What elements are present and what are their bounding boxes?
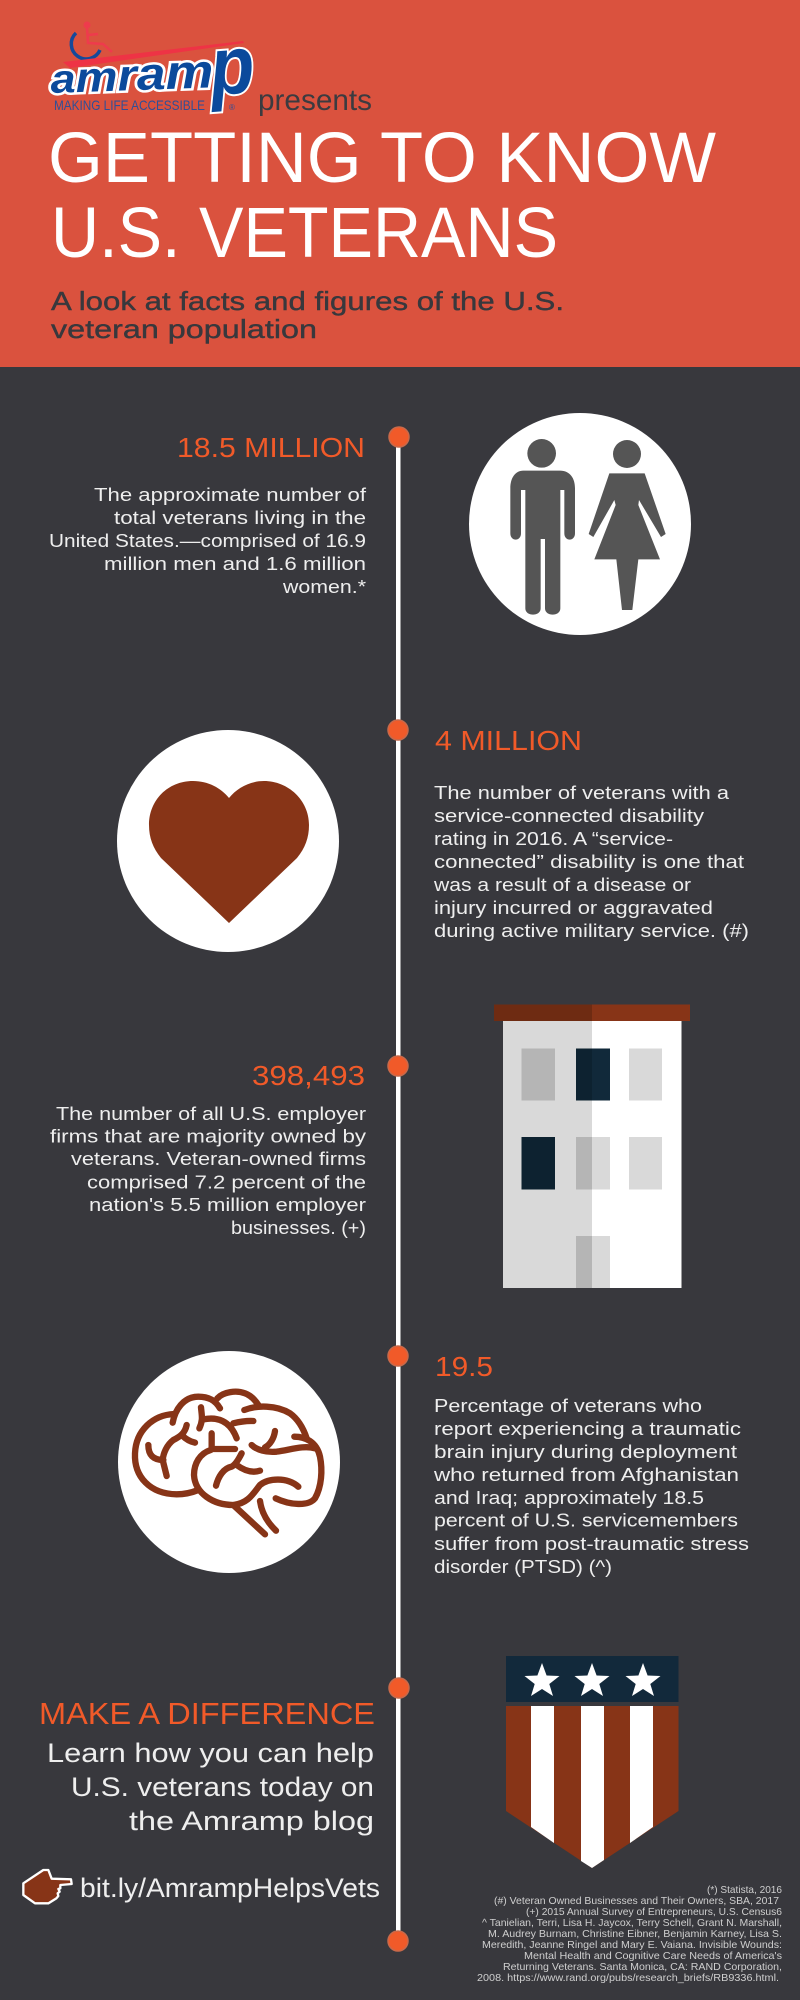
footnotes: Meredith, Jeanne Ringel and Mary E. Vaiana. Invisible Wounds: (482, 1939, 782, 1951)
text block: employer firms: comprised 7.2 percent of the (87, 1172, 366, 1192)
title (48, 119, 716, 273)
text block: call to action: U.S. veterans today on (71, 1772, 374, 1802)
text block: traumatic brain injury: suffer from post-traumatic stress (434, 1533, 749, 1554)
panel: 19.5 percent brain injury (118, 1351, 749, 1577)
icon: brain in circle (118, 1351, 340, 1573)
footnotes: 2008. https://www.rand.org/pubs/research_briefs/RB9336.html. (477, 1972, 779, 1984)
icon: heart in circle (117, 730, 339, 952)
text block: employer firms: firms that are majority owned by (50, 1126, 367, 1146)
text block: employer firms: nation's 5.5 million employer (89, 1194, 366, 1215)
icon: pointing hand (23, 1870, 72, 1903)
text block: total veterans: The approximate number of (94, 484, 367, 505)
text block: disability rating: The number of veterans with a (434, 782, 730, 803)
text block: employer firms: The number of all U.S. employer (56, 1103, 366, 1124)
title: U.S. VETERANS (51, 194, 558, 273)
footnotes: Mental Health and Cognitive Care Needs of America's (524, 1950, 782, 1962)
text block: traumatic brain injury: percent of U.S. servicemembers (434, 1510, 738, 1530)
text block: traumatic brain injury: brain injury during deployment (434, 1441, 737, 1462)
panel: make a difference (23, 1696, 380, 1903)
subtitle: veteran population (51, 314, 317, 344)
footnotes: ^ Tanielian, Terri, Lisa H. Jaycox, Terry Schell, Grant N. Marshall, (482, 1917, 782, 1929)
icon: building (494, 1004, 690, 1288)
footnotes: (#) Veteran Owned Businesses and Their Owners, SBA, 2017 (494, 1895, 779, 1907)
heading: 4 million: 4 MILLION (435, 725, 582, 756)
text block: employer firms (50, 1103, 367, 1238)
timeline (388, 427, 409, 1951)
icon: flag shield (506, 1656, 678, 1868)
text block: disability rating: was a result of a disease or (433, 874, 691, 895)
text block: employer firms: businesses. (+) (231, 1217, 366, 1238)
panel: header (0, 0, 800, 367)
footnotes: M. Audrey Burnam, Christine Eibner, Benjamin Karney, Lisa S. (488, 1928, 782, 1940)
logo: amramp: amram (50, 45, 214, 104)
heading: make a difference: MAKE A DIFFERENCE (39, 1696, 375, 1731)
text block: disability rating (433, 782, 749, 941)
logo: amramp: MAKING LIFE ACCESSIBLE (54, 97, 205, 113)
text block: traumatic brain injury: disorder (PTSD) (^) (434, 1556, 612, 1577)
footnotes: (*) Statista, 2016 (707, 1884, 782, 1896)
text block: traumatic brain injury: and Iraq; approximately 18.5 (434, 1487, 704, 1508)
text block: total veterans: United States.—comprised of 16.9 (49, 530, 366, 551)
text block: disability rating: connected” disability is one that (434, 851, 744, 872)
subtitle (51, 286, 564, 344)
heading: 19.5: 19.5 (435, 1351, 493, 1382)
text block: traumatic brain injury (433, 1395, 749, 1577)
logo: amramp: ® (229, 103, 235, 112)
text block: call to action: the Amramp blog (129, 1806, 374, 1836)
icon: man and woman in circle (469, 413, 691, 635)
footnotes (477, 1884, 782, 1984)
presents label: presents (258, 84, 372, 117)
footnotes: Returning Veterans. Santa Monica, CA: RAND Corporation, (503, 1961, 782, 1973)
text block: employer firms: veterans. Veteran-owned firms (71, 1148, 366, 1169)
logo: amramp (50, 19, 257, 113)
text block: traumatic brain injury: who returned from Afghanistan (433, 1464, 739, 1485)
text block: traumatic brain injury: report experiencing a traumatic (434, 1418, 741, 1439)
heading: 18.5 million: 18.5 MILLION (177, 432, 365, 463)
panel: 18.5 million veterans (49, 413, 691, 635)
panel: 398,493 employer firms (50, 1004, 690, 1288)
panel: 4 million disability (117, 725, 749, 952)
heading: 398,493: 398,493 (252, 1060, 365, 1091)
text block: disability rating: service-connected disability (434, 805, 705, 826)
text block: total veterans: million men and 1.6 million (104, 553, 366, 574)
text block: total veterans (49, 484, 367, 597)
text block: total veterans: total veterans living in the (114, 507, 366, 528)
text block: call to action (47, 1738, 374, 1836)
text block: disability rating: rating in 2016. A “service- (434, 828, 673, 849)
text block: disability rating: during active military service. (#) (434, 920, 749, 941)
footnotes: (+) 2015 Annual Survey of Entrepreneurs, U.S. Census6 (526, 1906, 782, 1918)
text block: total veterans: women.* (282, 576, 366, 597)
text block: disability rating: injury incurred or aggravated (434, 897, 713, 918)
link: bit.ly: bit.ly/AmrampHelpsVets (80, 1873, 380, 1903)
title: GETTING TO KNOW (48, 119, 716, 198)
subtitle: A look at facts and figures of the U.S. (51, 286, 564, 316)
text block: traumatic brain injury: Percentage of veterans who (434, 1395, 702, 1416)
logo: amramp: p (205, 19, 257, 113)
icon: wheelchair (71, 22, 112, 59)
text block: call to action: Learn how you can help (47, 1738, 374, 1768)
